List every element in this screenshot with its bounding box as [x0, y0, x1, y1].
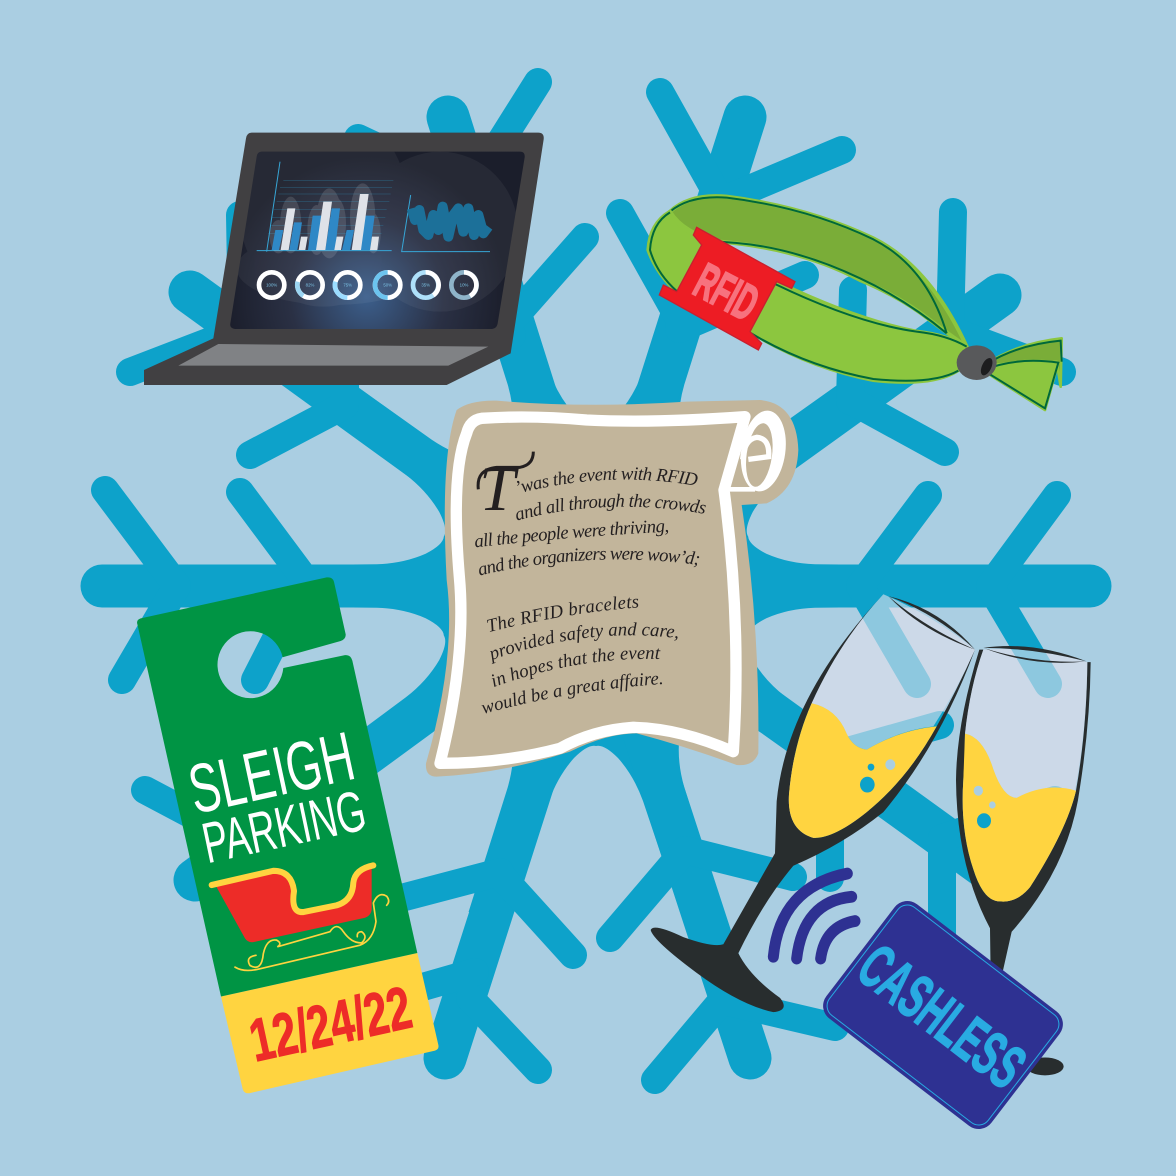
poem text: and all through the crowds — [516, 494, 706, 520]
screen glass reflections — [238, 152, 516, 312]
red RFID clip — [659, 227, 795, 350]
donut percentage labels: 100% — [266, 283, 277, 288]
RFID wristband — [648, 196, 1062, 410]
donut percentage labels: 35% — [421, 283, 430, 288]
poem text: and the organizers were wow’d; — [479, 548, 700, 576]
donut percentage labels: 10% — [460, 283, 468, 288]
gray knot bead — [957, 345, 997, 380]
donut percentage labels: 50% — [383, 283, 392, 288]
sleigh parking door hanger — [137, 577, 439, 1093]
donut progress rings — [259, 272, 477, 298]
infographic canvas — [80, 68, 1112, 1129]
yellow date strip — [221, 953, 439, 1093]
donut percentage labels — [266, 283, 468, 288]
poem text: would be a great affaire. — [482, 673, 662, 714]
laptop screen — [230, 152, 525, 329]
laptop keyboard deck — [178, 344, 488, 366]
poem text: provided safety and care, — [490, 622, 678, 664]
donut percentage labels: 75% — [343, 283, 352, 288]
poem text: The RFID bracelets — [487, 596, 638, 632]
poem text — [475, 452, 706, 714]
line chart on screen — [402, 195, 490, 252]
cashless card — [817, 895, 1069, 1135]
band front strap — [648, 212, 967, 382]
left champagne flute — [651, 594, 975, 1012]
poem text: ’was the event with RFID — [517, 467, 698, 492]
bar chart on screen — [257, 162, 393, 258]
sleigh illustration — [212, 865, 389, 970]
scroll outer border — [426, 400, 798, 777]
right glass foot — [1026, 1057, 1064, 1075]
snowflake background — [102, 82, 1090, 1080]
drop capital T: T — [479, 453, 519, 524]
poem text: all the people were thriving, — [475, 520, 668, 548]
laptop with analytics dashboard — [144, 107, 544, 385]
parchment scroll with poem — [426, 400, 798, 777]
RFID label: RFID — [686, 253, 768, 332]
right champagne flute — [956, 646, 1091, 976]
wristband bow tails — [983, 338, 1062, 410]
laptop body — [144, 133, 544, 385]
donut percentage labels: 82% — [306, 283, 314, 288]
sleigh parking heading — [182, 717, 371, 876]
sleigh parking heading: PARKING — [197, 778, 371, 876]
poem text: in hopes that the event — [492, 648, 660, 687]
event date: 12/24/22 — [244, 973, 417, 1075]
scroll page — [440, 417, 745, 763]
band back loop — [670, 196, 967, 347]
green hanger body — [137, 577, 417, 997]
scroll curl — [728, 408, 791, 494]
contactless signal icon — [773, 874, 855, 959]
champagne glasses — [651, 594, 1091, 1075]
sleigh parking heading: SLEIGH — [182, 717, 361, 829]
